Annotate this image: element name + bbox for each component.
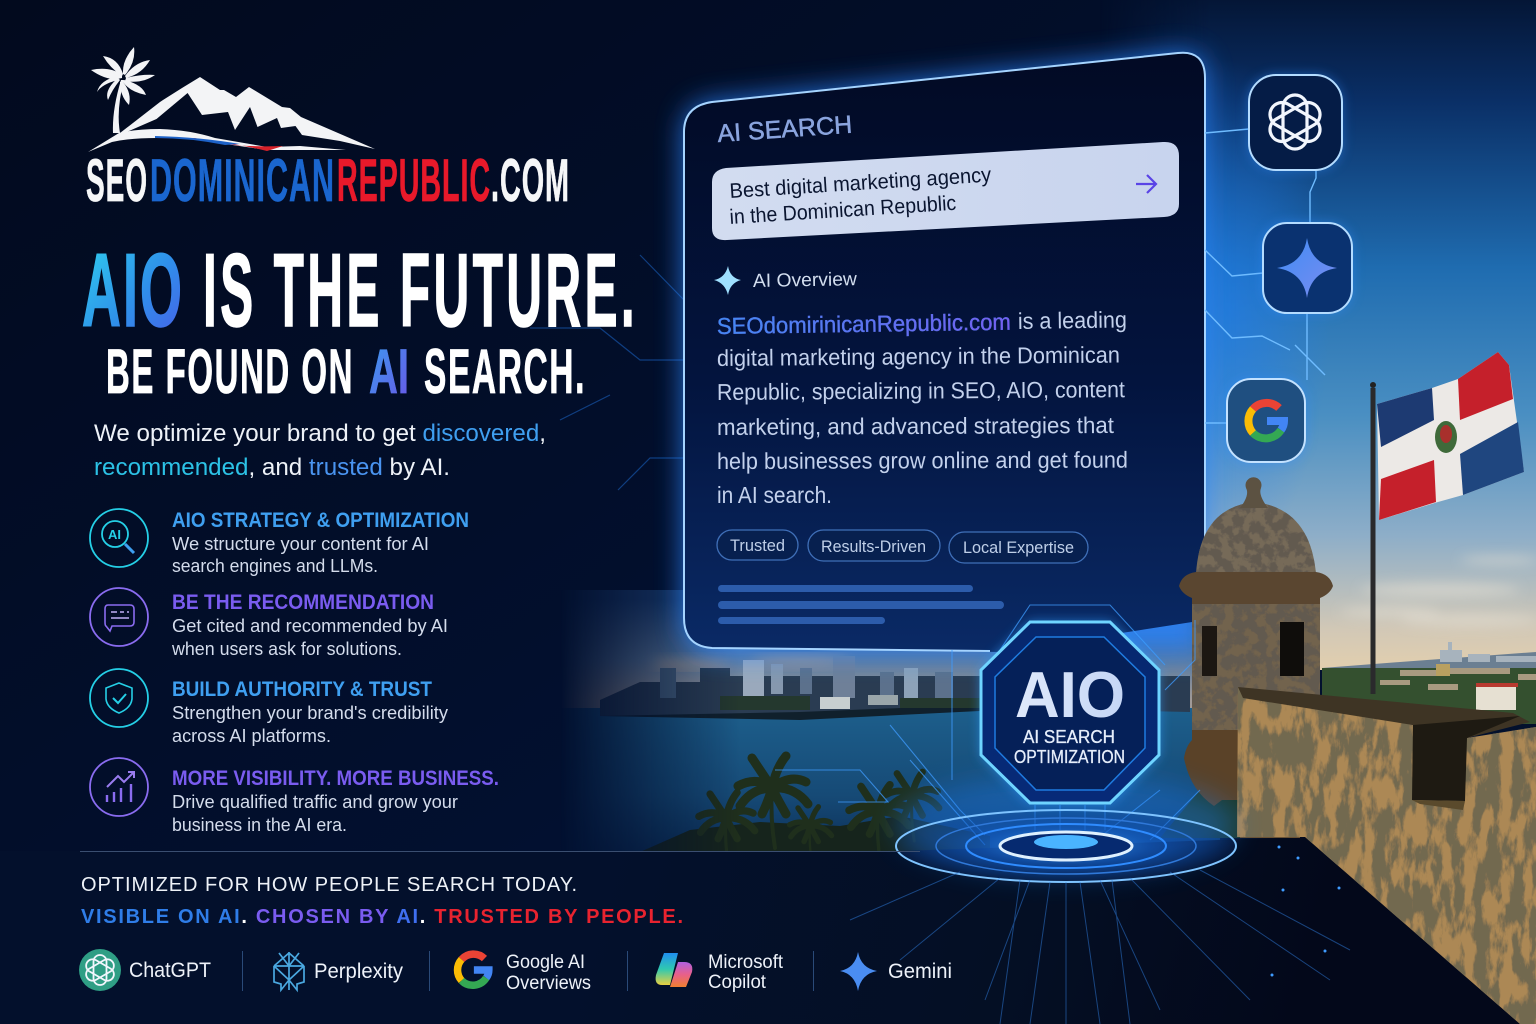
overview paragraph: SEOdomirinicanRepublic.com [717,309,1011,339]
Google AI Overviews logo [458,952,591,994]
panel: AI search card [684,53,1205,652]
benefit: strategy: We structure your content for AI [172,534,429,554]
tag pills: Trusted [730,536,785,555]
logo wordmark: SEO [86,147,148,214]
AIO badge: OPTIMIZATION [1014,747,1125,767]
bottom tagline: OPTIMIZED FOR HOW PEOPLE SEARCH TODAY. [81,874,577,896]
text: .COM [491,147,570,214]
placeholder text bars [718,585,1004,624]
headline: AI [369,337,409,407]
bottom tagline: VISIBLE ON AI. CHOSEN BY AI. TRUSTED BY PEOPLE. [81,906,683,928]
app icon: ChatGPT [1249,75,1342,170]
benefit: visibility: Drive qualified traffic and grow your [172,792,458,812]
benefit: visibility: MORE VISIBILITY. MORE BUSINESS. [172,767,499,790]
benefit: recommendation: when users ask for solutions. [171,639,402,659]
foreground palms [642,752,990,851]
headline: SEARCH. [424,337,586,407]
benefit: recommendation: Get cited and recommended by AI [172,616,448,636]
AI overview label: AI Overview [753,269,857,292]
Perplexity logo [274,952,403,990]
Perplexity logo: Perplexity [314,960,403,983]
logo: palm and mountains [88,47,375,152]
Google AI Overviews logo: Overviews [506,973,591,994]
Gemini logo: Gemini [888,960,952,983]
AI overview label [714,266,857,295]
search bar [712,142,1179,240]
search bar: in the Dominican Republic [729,192,957,229]
search bar: Best digital marketing agency [729,164,992,203]
overview paragraph: in AI search. [717,482,832,508]
floor [0,837,1520,1024]
Gemini logo [840,952,952,991]
headline: BE FOUND ON [106,337,354,407]
subheading [94,420,546,481]
benefit: strategy: AI [108,527,121,542]
tag pills: Local Expertise [963,538,1074,557]
AIO badge: AI SEARCH [1023,727,1115,747]
benefit: visibility [90,758,499,835]
flag pole [1370,382,1376,694]
network lines left of the panel [530,255,684,490]
platform: glowing rings [850,775,1350,1024]
connector lines to app icons [1205,129,1325,423]
tag pills: Results-Driven [821,537,926,556]
text: IS THE FUTURE. [203,233,638,349]
logo wordmark: REPUBLIC [337,147,491,214]
circuit lines around AIO badge [775,605,1200,845]
right photo: distant city skyline [1322,642,1536,724]
benefit: strategy: search engines and LLMs. [172,556,378,576]
overview paragraph: marketing, and advanced strategies that [717,412,1115,440]
benefit: authority: across AI platforms. [172,726,331,746]
Dominican flag [1377,352,1524,520]
Google AI Overviews logo: Google AI [506,952,585,973]
tag pills [717,530,1088,563]
overview paragraph: Republic, specializing in SEO, AIO, content [717,376,1126,405]
sky behind flag and panel [1100,0,1536,670]
AIO badge: AIO [1015,658,1125,731]
platform logos row [79,949,952,994]
benefit: strategy: AIO STRATEGY & OPTIMIZATION [172,509,469,532]
sentry tower [1160,477,1333,838]
app icon: Google [1227,379,1305,462]
Microsoft Copilot logo: Copilot [708,972,767,993]
benefit: authority [90,669,448,746]
benefit: visibility: business in the AI era. [172,815,347,835]
ChatGPT logo [79,949,211,991]
overview paragraph: help businesses grow online and get found [717,447,1128,474]
harbour skyline [600,656,1190,720]
overview paragraph: digital marketing agency in the Dominican [717,341,1120,371]
headline [82,233,638,407]
ChatGPT logo: ChatGPT [129,959,211,982]
subheading: We optimize your brand to get discovered, [94,420,546,447]
Microsoft Copilot logo [656,952,784,993]
logo wordmark: DOMINICAN [150,147,335,214]
app icon: Gemini [1263,223,1352,313]
harbour photo: sky, city, water and palms [540,590,1220,866]
benefit: authority: BUILD AUTHORITY & TRUST [172,678,432,701]
overview paragraph [717,306,1128,508]
Microsoft Copilot logo: Microsoft [708,952,784,973]
benefit: recommendation [90,588,448,659]
benefit: recommendation: BE THE RECOMMENDATION [172,591,434,614]
bottom tagline [81,874,683,928]
benefit: authority: Strengthen your brand's credibility [172,703,448,723]
benefit: strategy [90,509,469,576]
AIO badge [981,622,1159,803]
subheading: recommended, and trusted by AI. [94,454,450,481]
overview paragraph: is a leading [1018,306,1127,334]
fort wall [1237,687,1536,1024]
headline: AIO [82,233,184,349]
panel label: AI SEARCH [716,111,853,148]
